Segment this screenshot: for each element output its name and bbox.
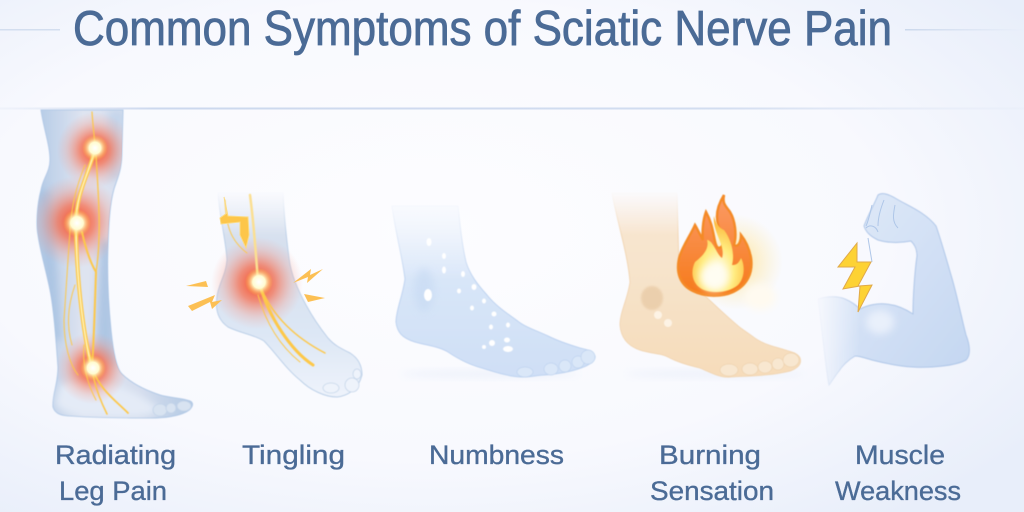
panel: tingling bbox=[186, 193, 362, 470]
label: Radiating Leg Pain bbox=[55, 440, 176, 506]
panel: burning sensation bbox=[612, 193, 805, 506]
panel: radiating leg pain bbox=[30, 110, 193, 506]
label: Numbness: Numbness bbox=[429, 440, 564, 470]
label: Burning Sensation: Burning bbox=[659, 440, 761, 470]
label: Radiating Leg Pain: Radiating bbox=[55, 440, 176, 470]
icon: sparks bbox=[186, 269, 325, 311]
title: Common Symptoms of Sciatic Nerve Pain bbox=[73, 2, 892, 56]
icon: lightning bolt bbox=[220, 197, 249, 248]
illustration: flexed arm bbox=[818, 194, 969, 385]
icon: flame bbox=[678, 195, 783, 310]
label: Muscle Weakness: Weakness bbox=[835, 476, 961, 506]
panel: muscle weakness bbox=[818, 194, 969, 506]
label: Radiating Leg Pain: Leg Pain bbox=[59, 476, 167, 506]
label: Burning Sensation bbox=[650, 440, 774, 506]
illustration: warm foot bbox=[612, 193, 805, 378]
icon: lightning bolt bbox=[838, 243, 872, 312]
label: Tingling: Tingling bbox=[242, 440, 345, 470]
illustration: foot with sparks bbox=[186, 193, 362, 397]
panel: numbness bbox=[392, 206, 595, 470]
label: Muscle Weakness bbox=[835, 440, 961, 506]
label: Burning Sensation: Sensation bbox=[650, 476, 774, 506]
illustration: pale foot bbox=[392, 206, 595, 378]
illustration: leg with nerve bbox=[30, 110, 193, 418]
label: Muscle Weakness: Muscle bbox=[855, 440, 945, 470]
